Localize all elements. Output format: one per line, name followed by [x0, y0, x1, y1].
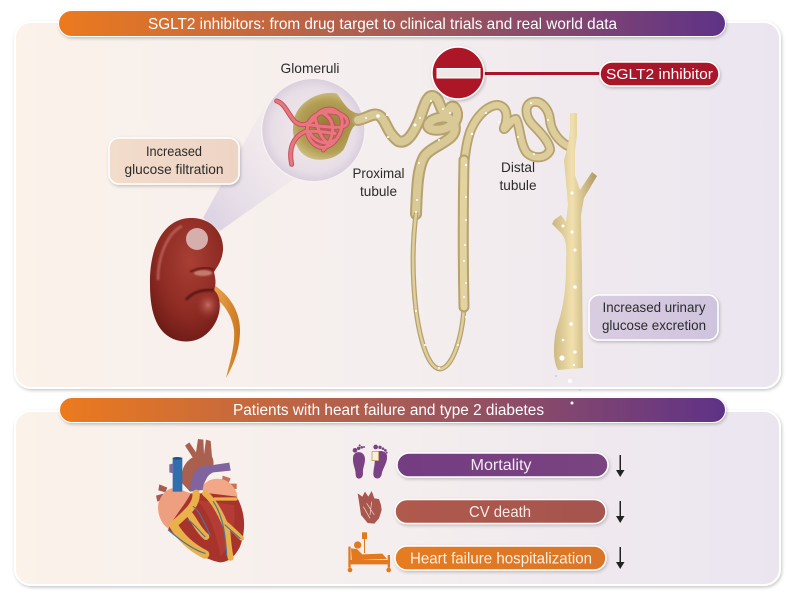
label: Distal tubule: tubule: [500, 177, 537, 193]
icon: kidney with ureter: [150, 218, 240, 378]
bar: Mortality: [397, 453, 608, 477]
title banner: SGLT2 inhibitors: from drug target to clinical trials and real world data: [148, 16, 617, 33]
icon: collecting duct: [552, 113, 597, 370]
bar: Heart failure hospitalization: Heart failure hospitalization: [410, 550, 592, 568]
callout: increased glucose filtration: Increased: [146, 143, 202, 159]
callout: increased glucose filtration: [109, 138, 239, 184]
pill: SGLT2 inhibitor: [600, 62, 719, 86]
callout: increased urinary glucose excretion: [589, 295, 718, 340]
callout: increased glucose filtration: glucose filtration: [124, 161, 224, 177]
title banner: [58, 10, 726, 36]
callout: increased urinary glucose excretion: Increased urinary: [602, 299, 706, 315]
label: Proximal tubule: tubule: [360, 183, 397, 199]
callout: increased urinary glucose excretion: glucose excretion: [602, 317, 706, 333]
light cone from kidney to glomerulus: [203, 105, 295, 231]
arrow: CV death down: [616, 501, 624, 523]
section banner: patients: [60, 398, 726, 422]
icon: anatomical heart: [156, 439, 244, 562]
label: Distal tubule: Distal: [501, 159, 535, 175]
bar: Mortality: Mortality: [470, 457, 532, 474]
panel: SGLT2 mechanism: [15, 22, 780, 391]
pill: SGLT2 inhibitor: SGLT2 inhibitor: [606, 66, 713, 83]
label: Distal tubule: [500, 159, 537, 193]
icon: small heart: [358, 491, 382, 524]
label: Proximal tubule: [352, 165, 404, 199]
bar: Heart failure hospitalization: [395, 546, 606, 570]
section banner: patients: Patients with heart failure and type 2 diabetes: [233, 402, 544, 419]
bar: CV death: CV death: [469, 504, 531, 521]
label: Proximal tubule: Proximal: [352, 165, 404, 181]
icon: patient in hospital bed: [348, 532, 391, 572]
icon: feet with toe tag: [353, 444, 388, 479]
arrow: hospitalization down: [616, 547, 624, 569]
icon: no-entry sign: [432, 47, 484, 99]
icon: glomerulus magnified circle: [262, 78, 370, 182]
bar: CV death: [395, 500, 606, 524]
label: Glomeruli: Glomeruli: [280, 60, 340, 76]
icon: nephron tubule: [358, 96, 568, 369]
arrow: mortality down: [616, 455, 624, 477]
glucose particles: [365, 100, 581, 391]
connector line: inhibitor to stop sign: [484, 72, 602, 75]
panel: patients outcomes: [15, 411, 780, 585]
